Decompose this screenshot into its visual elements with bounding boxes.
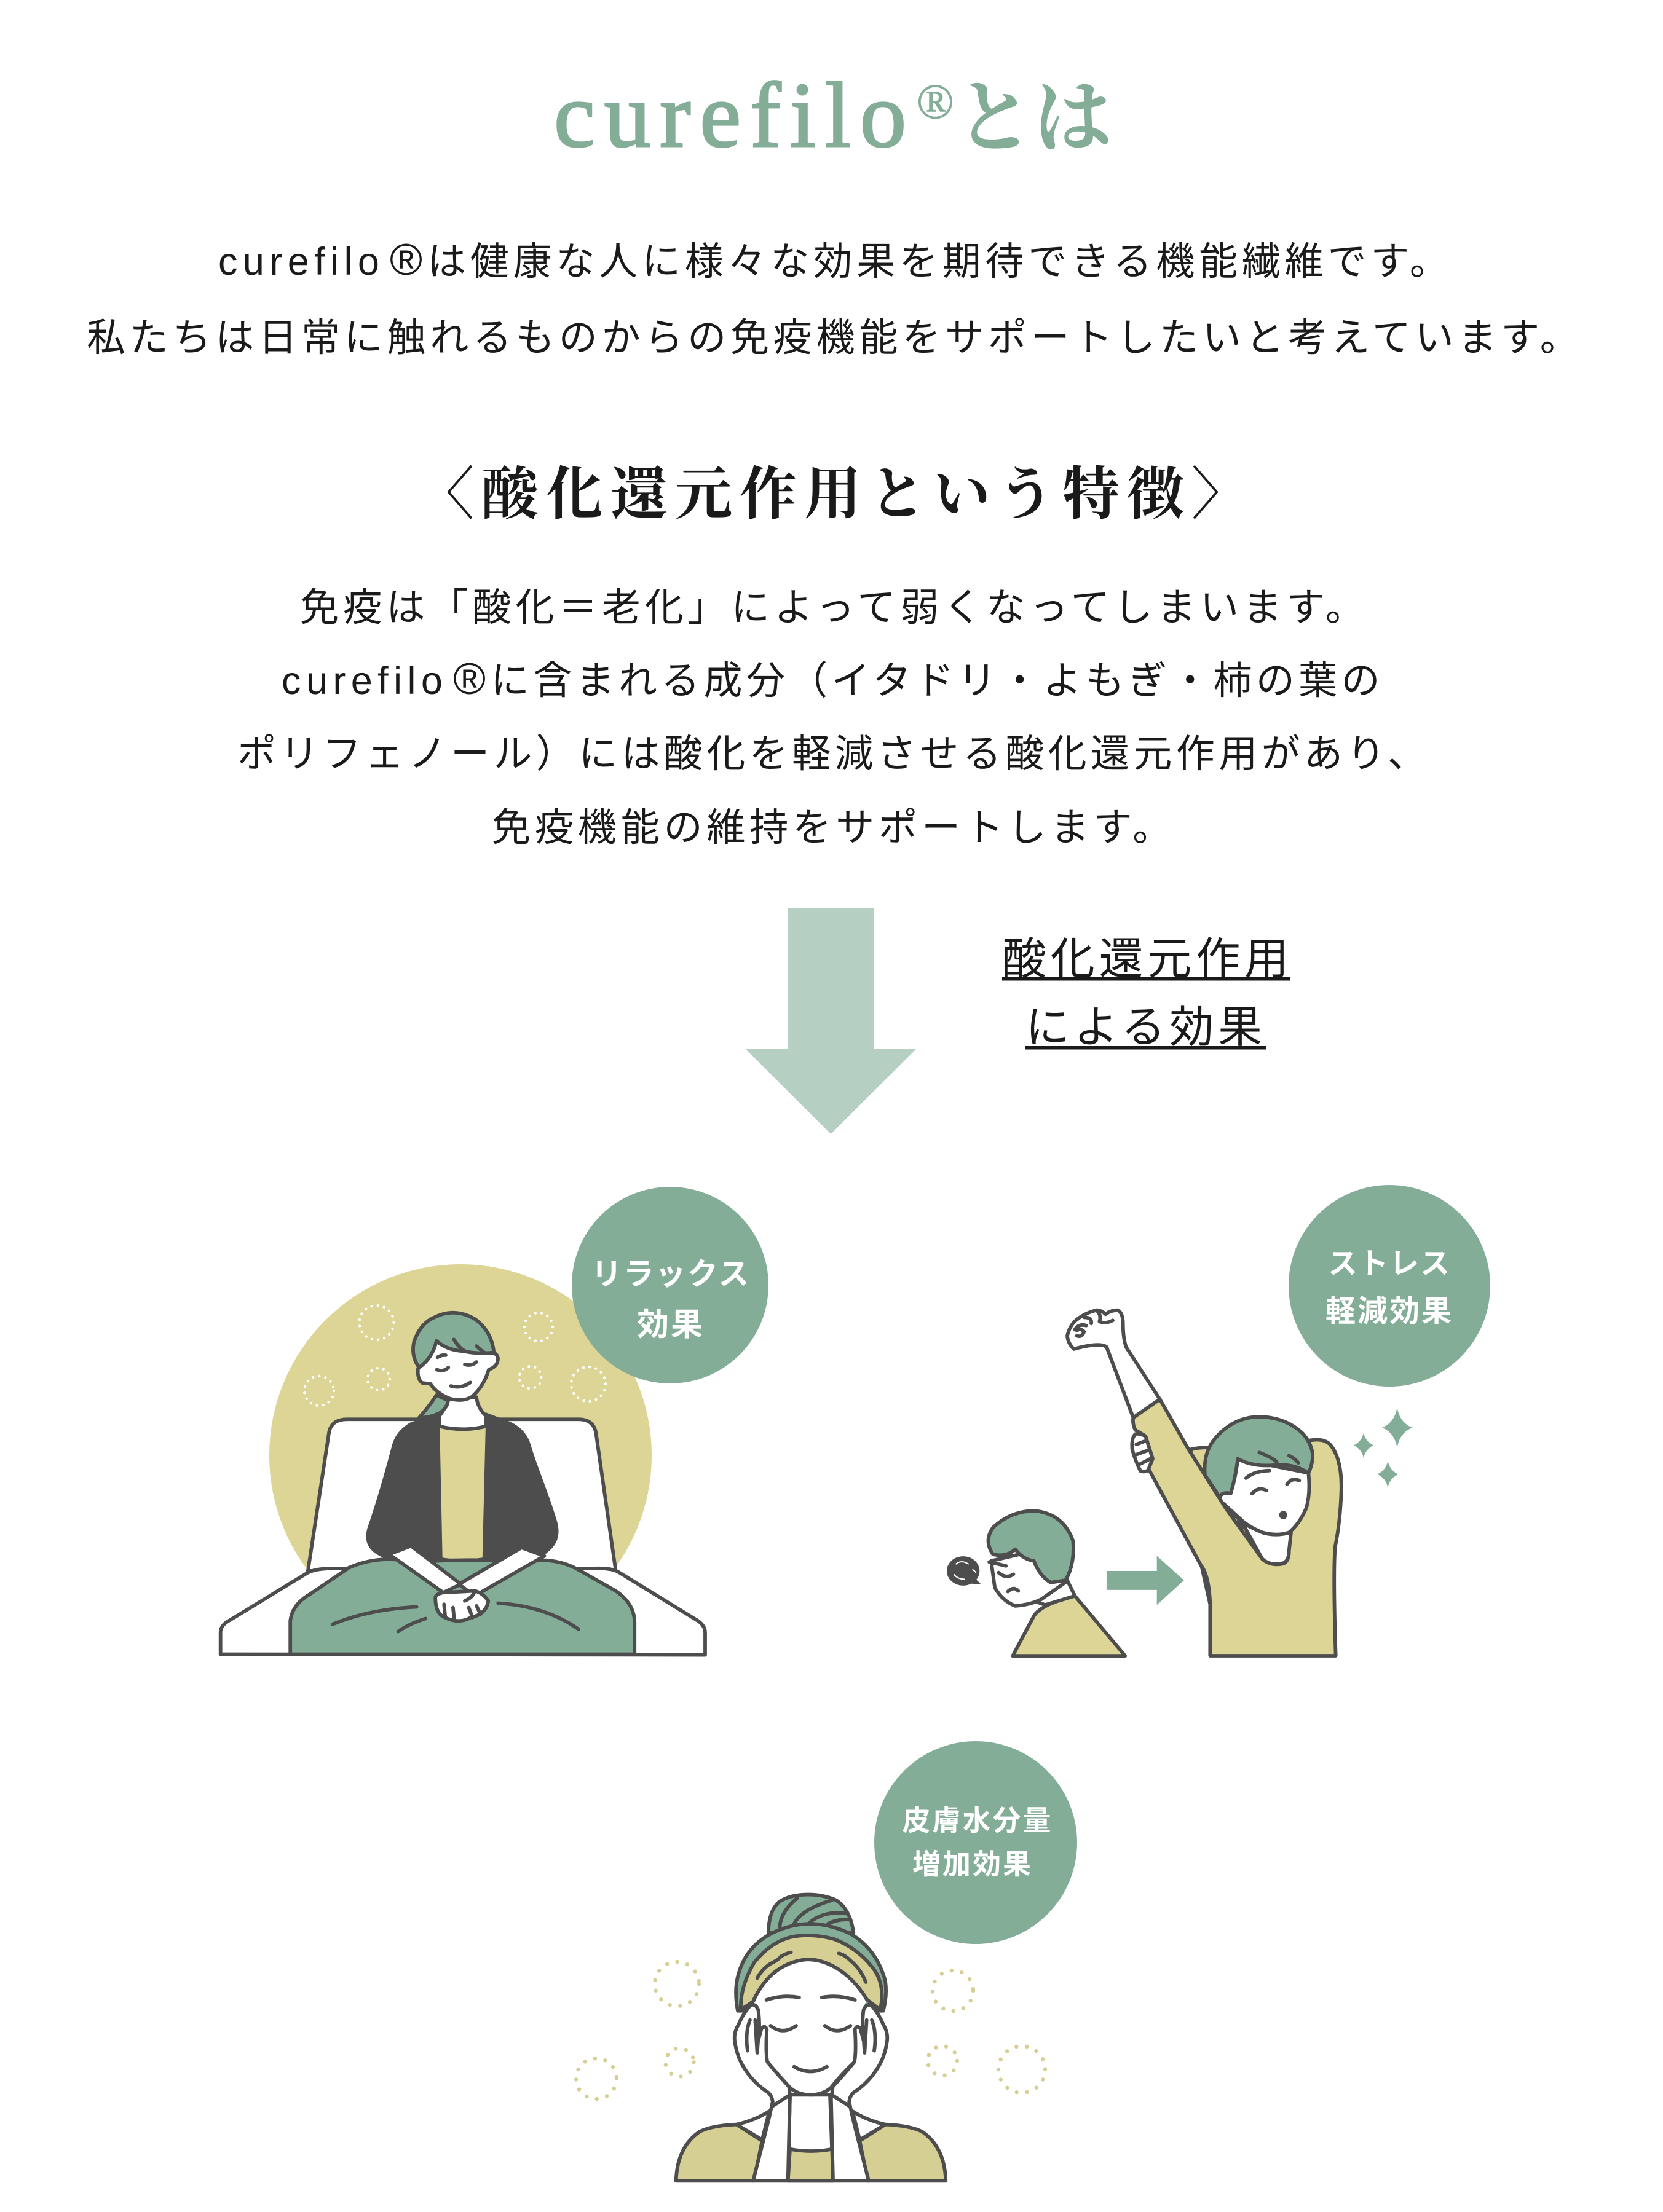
stretching person [1067,1310,1341,1656]
sparkle bubbles [304,1305,606,1406]
illustration: stress reduction [947,1310,1412,1656]
moisture bubbles [576,1962,1045,2099]
badge: relax effect [572,1187,768,1383]
intro text block: は健康な人に様々な効果を期待できる機能繊維です。 [427,240,1453,283]
badge: stress reduction [1289,1185,1490,1387]
badge: relax effect: 効果 [637,1307,705,1343]
intro text block: curefilo [218,240,384,283]
effect label: による効果 [1025,1003,1266,1052]
badge: stress reduction: 軽減効果 [1325,1295,1453,1328]
badge: skin moisture: 皮膚水分量 [903,1805,1053,1836]
woman head [413,1313,498,1429]
badge: skin moisture [874,1741,1077,1944]
illustration: relax effect [221,1264,705,1655]
badge: skin moisture: 増加効果 [912,1848,1033,1880]
description text block: 免疫機能の維持をサポートします。 [492,806,1175,849]
woman touching face [676,1895,946,2181]
blanket and hands [290,1546,634,1654]
intro text block: ® [390,235,422,285]
yellow background circle [269,1264,652,1647]
description text block: curefilo [282,659,448,703]
title [554,55,1112,168]
effect label [1002,935,1293,1052]
description text block: に含まれる成分（イタドリ・よもぎ・柿の葉の [491,659,1384,703]
tired person, arrow and sparkles [947,1407,1412,1656]
badge: stress reduction: ストレス [1328,1248,1451,1280]
illustration: skin moisture [576,1895,1045,2181]
title: curefilo [554,63,915,167]
intro text block [87,235,1583,360]
description text block: 免疫は「酸化＝老化」によって弱くなってしまいます。 [300,586,1369,629]
description text block [237,586,1431,849]
title: とは [955,55,1112,168]
badge: relax effect: リラックス [591,1257,750,1291]
arrow: down [746,908,916,1134]
title: ® [917,75,954,129]
intro text block: 私たちは日常に触れるものからの免疫機能をサポートしたいと考えています。 [87,317,1583,360]
heading: redox feature: 〈酸化還元作用という特徴〉 [417,448,1256,530]
effect label: 酸化還元作用 [1002,935,1293,984]
description text block: ® [453,655,486,704]
sofa and jacket [221,1412,705,1655]
description text block: ポリフェノール）には酸化を軽減させる酸化還元作用があり、 [237,733,1431,776]
